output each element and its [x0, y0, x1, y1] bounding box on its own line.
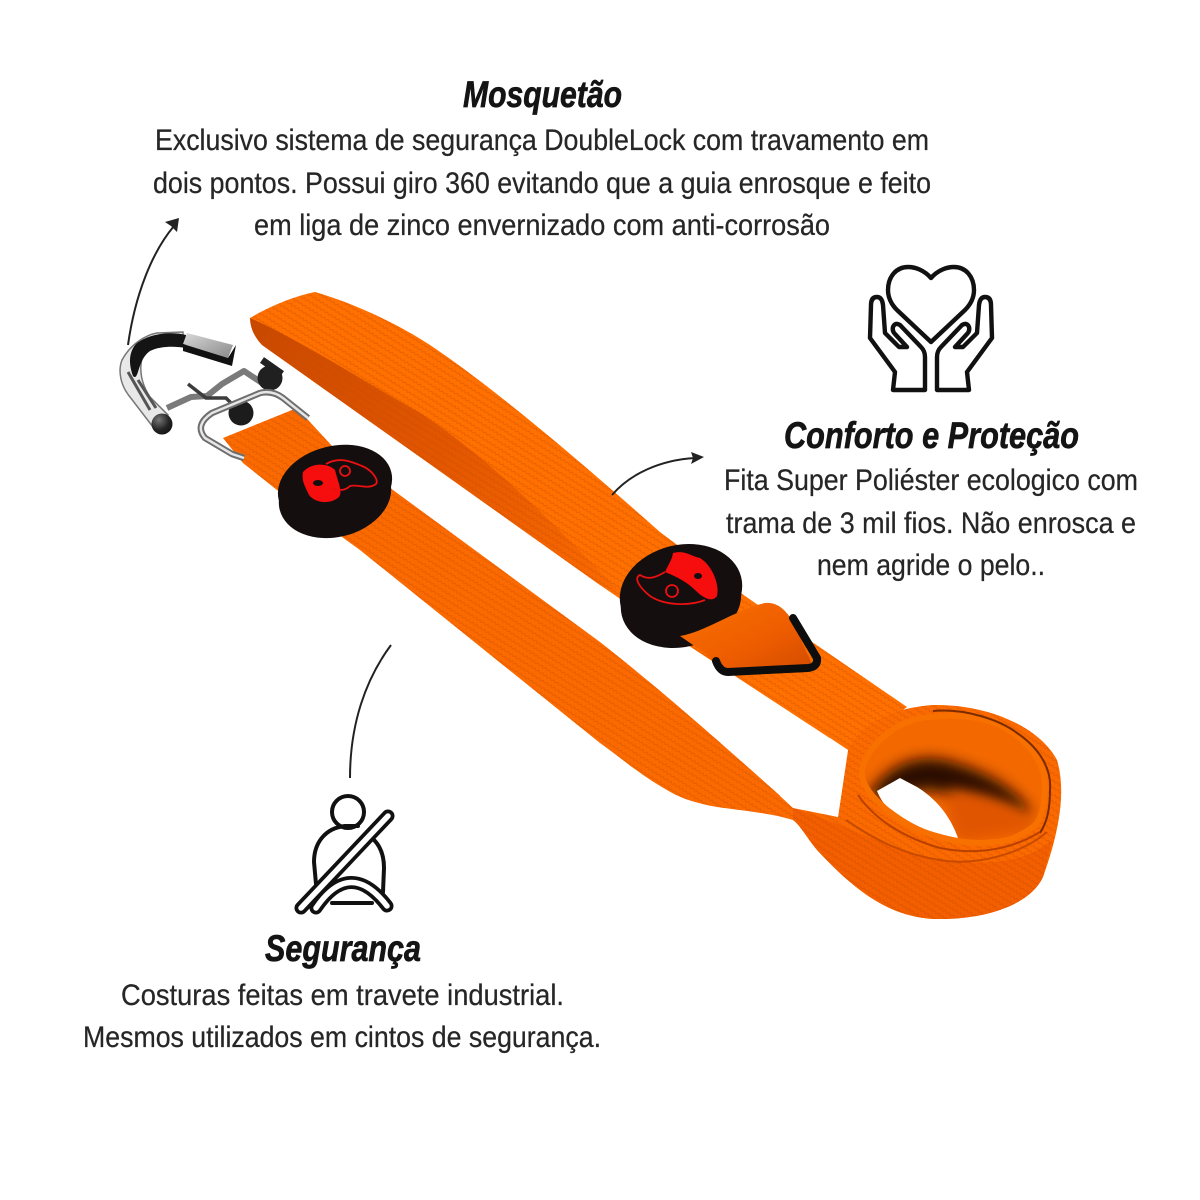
text block: Conforto description: [724, 464, 1138, 582]
carabiner: [120, 332, 282, 434]
folded tab: [680, 603, 812, 670]
metal buckle: [201, 392, 308, 458]
text block: Conforto description: Fita Super Poliéster ecologico com: [724, 464, 1138, 497]
upper strap: [250, 292, 907, 750]
white gap between straps: [780, 738, 848, 817]
icon: seat belt: [301, 796, 388, 908]
text block: Conforto description: trama de 3 mil fios. Não enrosca e: [726, 507, 1136, 540]
text block: Mosquetão description: Exclusivo sistema de segurança DoubleLock com travamento em: [155, 124, 929, 157]
text block: Segurança description: [83, 979, 601, 1054]
leash illustration: [120, 292, 1061, 919]
heading: Segurança: Segurança: [265, 928, 421, 969]
arrow: to Conforto e Proteção: [612, 452, 704, 495]
infographic canvas: [85, 80, 1136, 1054]
dog logo 2: [637, 552, 718, 604]
text block: Segurança description: Mesmos utilizados em cintos de segurança.: [83, 1021, 601, 1054]
dog logo 1: [303, 460, 377, 502]
triangular ring: [716, 618, 817, 672]
button 1: [269, 433, 401, 550]
wrap edges of the ring: [933, 711, 1050, 833]
text block: Conforto description: nem agride o pelo..: [817, 549, 1045, 582]
ring interior: [846, 711, 1050, 862]
text block: Mosquetão description: dois pontos. Possui giro 360 evitando que a guia enrosque e feito: [153, 167, 931, 200]
swivel stems: [167, 371, 262, 408]
arrow: to Mosquetão: [128, 218, 179, 345]
hole in ring: [877, 778, 958, 838]
heading: Mosquetão: Mosquetão: [463, 74, 622, 115]
lower strap and handle loop: [223, 408, 1061, 919]
text block: Mosquetão description: em liga de zinco envernizado com anti-corrosão: [254, 209, 830, 242]
heading: Conforto e Proteção: Conforto e Proteção: [784, 415, 1079, 456]
text block: Segurança description: Costuras feitas em travete industrial.: [121, 979, 564, 1012]
button 2: [609, 531, 753, 660]
text block: Mosquetão description: [153, 124, 931, 242]
icon: hands and heart: [870, 267, 992, 390]
arrow: from Segurança: [350, 645, 391, 778]
